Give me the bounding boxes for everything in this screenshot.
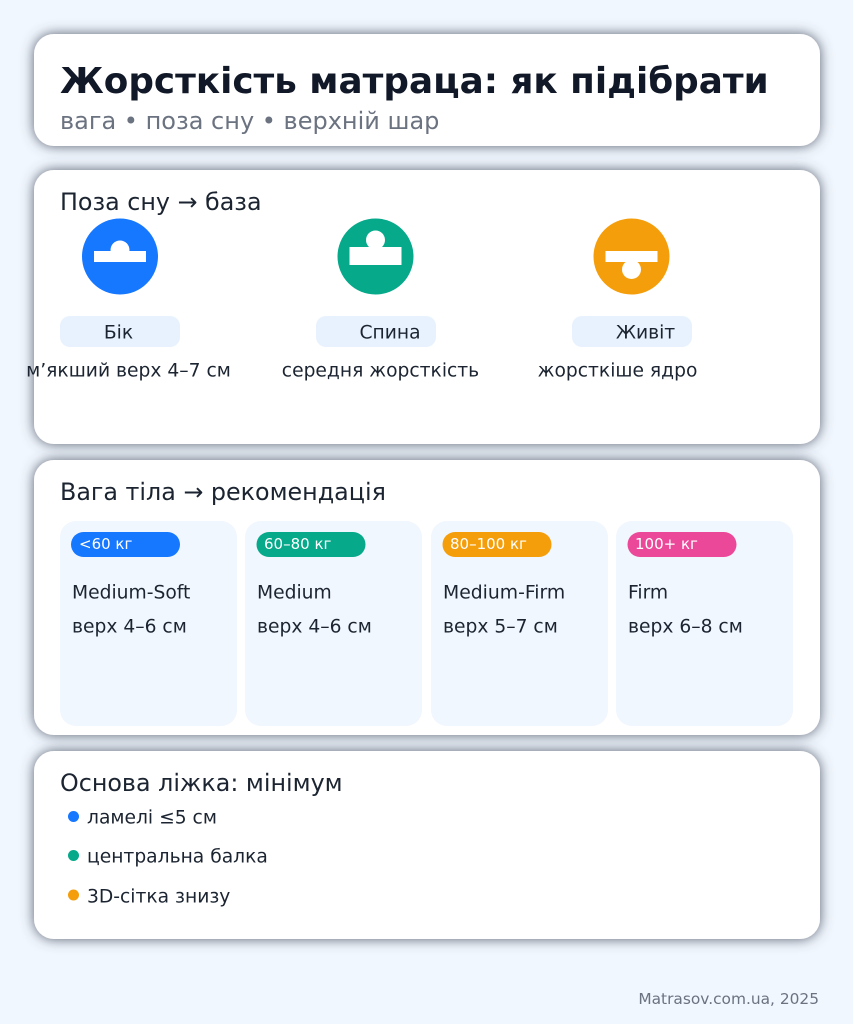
card: 60-80 kg (245, 521, 422, 726)
top layer: 4-6 cm: верх 4–6 см (257, 616, 372, 638)
card: under 60 kg (60, 521, 237, 726)
label: stomach: Живіт (616, 322, 675, 344)
panel: sleep position (26, 170, 820, 444)
firmness: medium: Medium (257, 582, 332, 604)
badge: 80-100 kg: 80–100 кг (450, 535, 527, 553)
label: stomach (572, 316, 692, 347)
heading: body weight: Вага тіла → рекомендація (60, 478, 386, 506)
icon: side position (82, 218, 158, 294)
top layer: 6-8 cm: верх 6–8 см (628, 616, 743, 638)
heading: sleep position: Поза сну → база (60, 188, 262, 216)
label: side: Бік (104, 322, 133, 344)
badge: under 60 kg: <60 кг (79, 535, 132, 553)
icon: back position (338, 218, 414, 294)
firmness: medium-soft: Medium-Soft (72, 582, 190, 604)
label: back (316, 316, 436, 347)
panel: body weight (34, 460, 820, 735)
firmness: firm: Firm (628, 582, 668, 604)
note: stomach: жорсткіше ядро (538, 360, 697, 382)
icon: stomach position (594, 218, 670, 294)
top layer: 5-7 cm: верх 5–7 см (443, 616, 558, 638)
note: back: середня жорсткість (282, 360, 479, 382)
badge: over 100 kg: 100+ кг (635, 535, 698, 553)
column: back sleeper (282, 218, 479, 382)
footer credit: Matrasov.com.ua, 2025 (638, 990, 819, 1008)
list item: slats: ламелі ≤5 см (87, 808, 217, 828)
list item: center beam: центральна балка (87, 846, 268, 868)
panel: header (34, 34, 820, 146)
column: stomach sleeper (538, 218, 697, 382)
badge: under 60 kg (71, 532, 180, 557)
card: 80-100 kg (431, 521, 608, 726)
list item: 3D mesh: 3D-сітка знизу (87, 886, 230, 908)
label: side (60, 316, 180, 347)
badge: 60-80 kg (256, 532, 366, 557)
label: back: Спина (359, 322, 421, 344)
badge: over 100 kg (628, 532, 736, 557)
top layer: 4-6 cm: верх 4–6 см (72, 616, 187, 638)
subtitle: вага • поза сну • верхній шар (60, 107, 439, 135)
panel: bed base (34, 751, 820, 939)
title: Жорсткість матраца: як підібрати (60, 61, 769, 102)
firmness: medium-firm: Medium-Firm (443, 582, 565, 604)
column: side sleeper (26, 218, 231, 382)
badge: 60-80 kg: 60–80 кг (264, 535, 332, 553)
card: over 100 kg (616, 521, 793, 726)
heading: bed base: Основа ліжка: мінімум (60, 769, 343, 797)
note: side: м’якший верх 4–7 см (26, 360, 231, 382)
badge: 80-100 kg (442, 532, 552, 557)
